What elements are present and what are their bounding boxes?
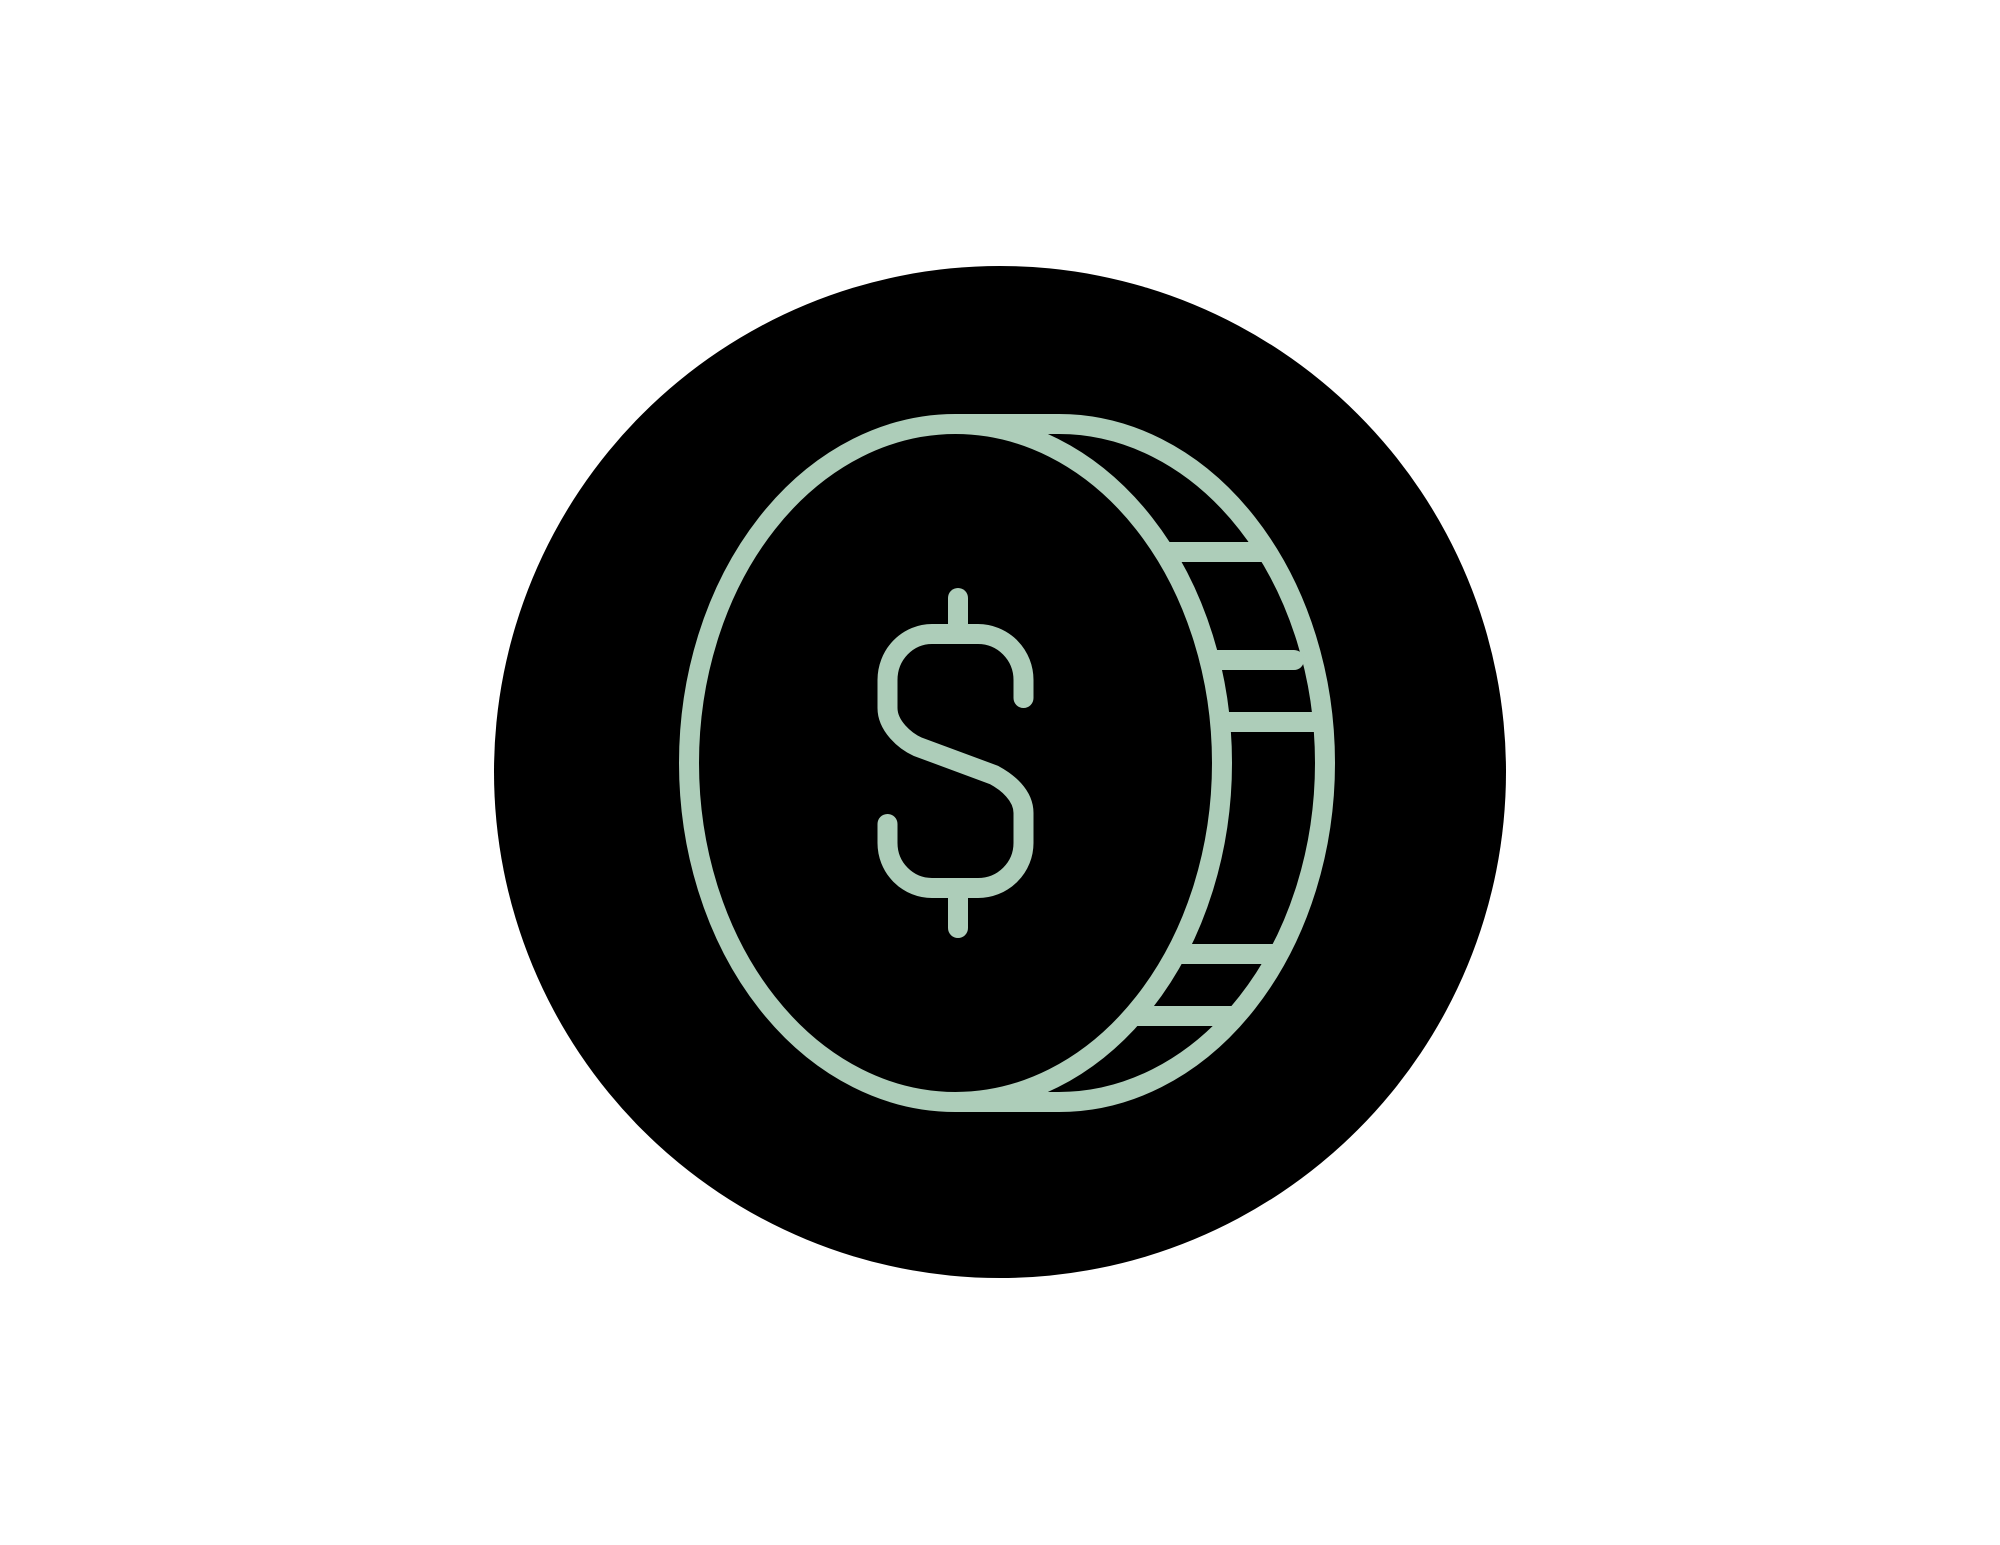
icon: coin [689,424,1325,1102]
coin front face [689,424,1222,1102]
coin back edge [956,424,1325,1102]
coin edge ridges [1133,552,1323,1016]
icon: black circle background [494,266,1506,1278]
icon: dollar sign [888,598,1024,928]
